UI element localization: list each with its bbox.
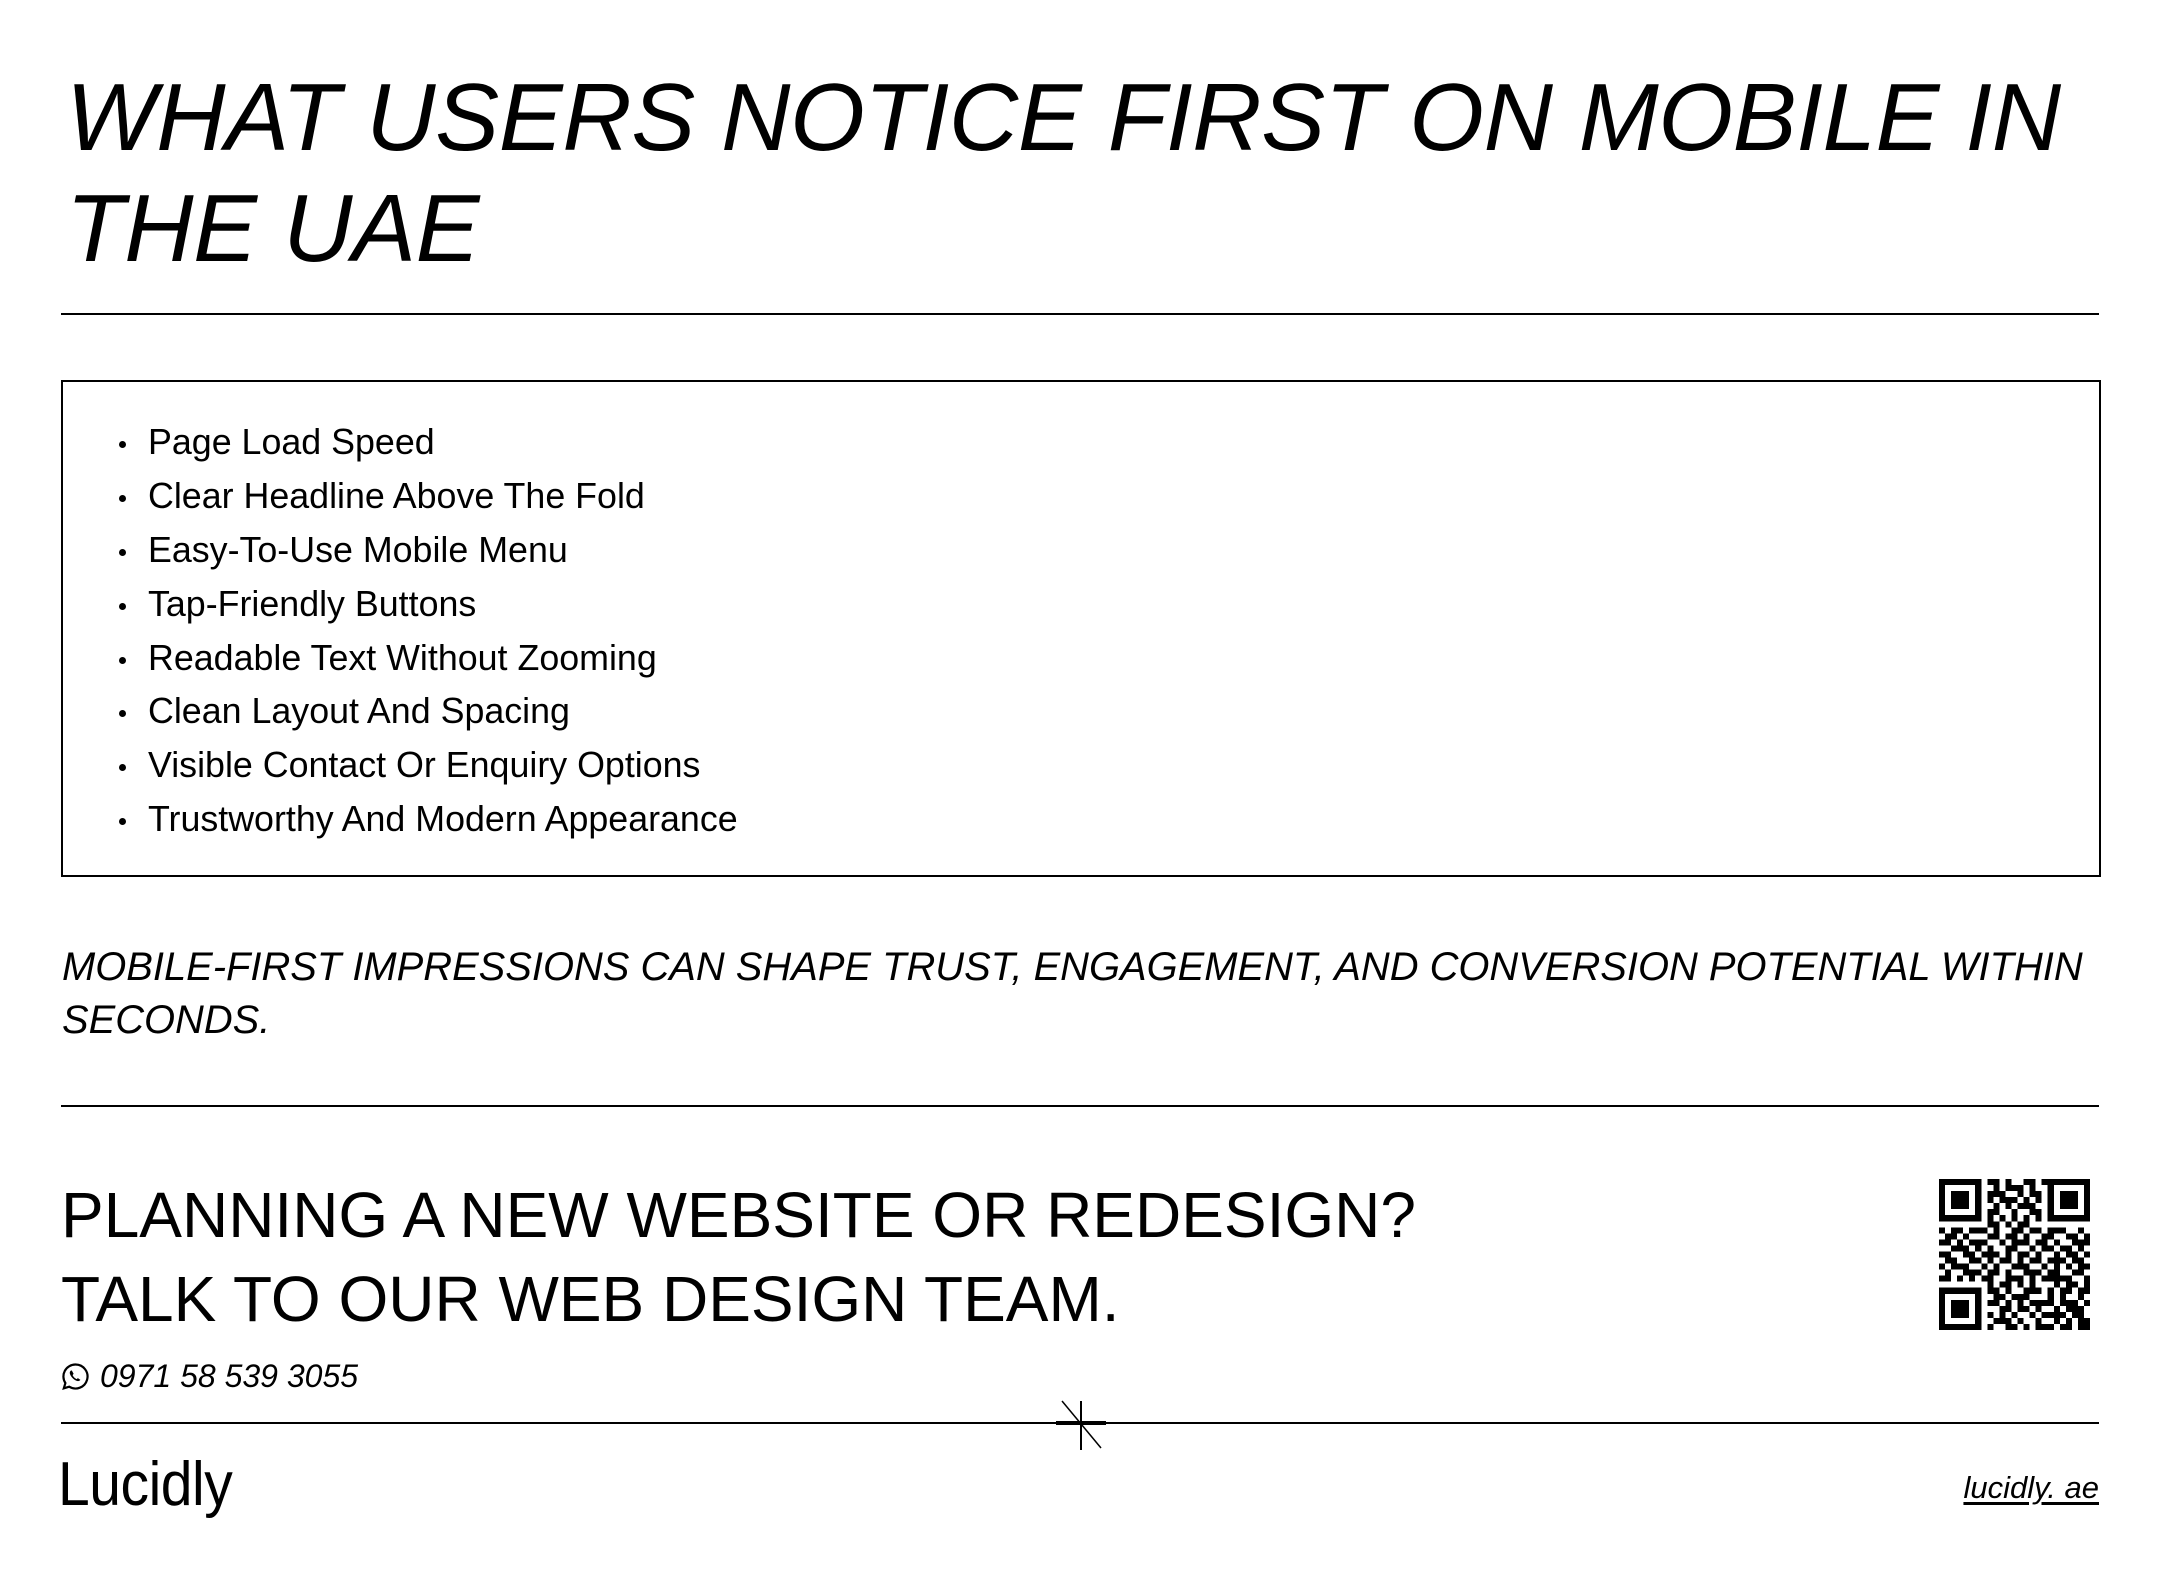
bullet list: Visible Contact Or Enquiry Options [148, 745, 700, 785]
website link: lucidly. ae [1963, 1470, 2099, 1505]
title: THE UAE [66, 175, 479, 282]
call to action heading: PLANNING A NEW WEBSITE OR REDESIGN? [61, 1179, 1416, 1251]
title [66, 64, 2062, 282]
icon: whatsapp [62, 1363, 89, 1390]
logo: Lucidly: Lucidly [58, 1450, 232, 1519]
phone contact [62, 1358, 358, 1394]
statement text: SECONDS. [62, 998, 270, 1042]
bullet list: Tap-Friendly Buttons [148, 584, 476, 624]
icon: star crosshair [1056, 1400, 1106, 1450]
bullet list: Easy-To-Use Mobile Menu [148, 530, 568, 570]
call to action heading [61, 1179, 1416, 1335]
QR code [1939, 1179, 2090, 1330]
statement text: MOBILE-FIRST IMPRESSIONS CAN SHAPE TRUST, ENGAGEMENT, AND CONVERSION POTENTIAL WITHIN [62, 945, 2083, 989]
bullet list: Trustworthy And Modern Appearance [148, 799, 738, 839]
bullet list: Readable Text Without Zooming [148, 638, 657, 678]
bullet list [119, 422, 738, 839]
statement text [62, 945, 2083, 1042]
bullet list: Clear Headline Above The Fold [148, 476, 645, 516]
call to action heading: TALK TO OUR WEB DESIGN TEAM. [61, 1263, 1120, 1335]
title: WHAT USERS NOTICE FIRST ON MOBILE IN [66, 64, 2061, 171]
bullet list: Page Load Speed [148, 422, 435, 462]
bullet list: Clean Layout And Spacing [148, 691, 570, 731]
text: 0971 58 539 3055 [100, 1358, 358, 1394]
panel: checklist box [61, 380, 2101, 877]
